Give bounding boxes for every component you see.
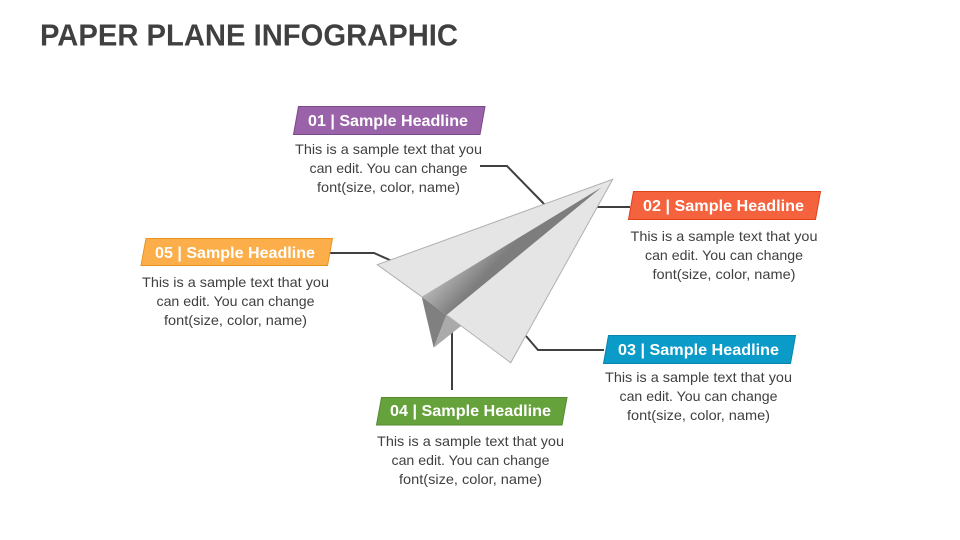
body 02: can edit. You can change <box>645 247 803 263</box>
headline 01: 01 | Sample Headline <box>308 113 468 130</box>
body 04: can edit. You can change <box>392 452 550 468</box>
connector: 02 <box>596 206 630 208</box>
headline 02: 02 | Sample Headline <box>643 198 804 215</box>
body 01: This is a sample text that you <box>295 141 482 157</box>
body 05: can edit. You can change <box>156 293 315 309</box>
headline 05: 05 | Sample Headline <box>155 245 315 262</box>
callout 01 <box>294 106 485 195</box>
banner 05 <box>141 238 332 266</box>
title: PAPER PLANE INFOGRAPHIC <box>40 18 458 52</box>
headline 03: 03 | Sample Headline <box>618 342 779 359</box>
callout 05 <box>141 238 332 328</box>
body 03: This is a sample text that you <box>605 369 792 385</box>
body 03: font(size, color, name) <box>627 407 770 423</box>
callout 04 <box>376 398 567 487</box>
body 02: This is a sample text that you <box>630 228 818 244</box>
body 05: font(size, color, name) <box>164 312 307 328</box>
banner 03 <box>604 336 796 364</box>
banner 02 <box>628 192 820 220</box>
connector: 03 <box>526 336 604 350</box>
connector: 04 <box>451 330 453 390</box>
body 02: font(size, color, name) <box>652 266 796 282</box>
body 05: This is a sample text that you <box>142 274 329 290</box>
body 01: can edit. You can change <box>310 160 468 176</box>
icon: paper plane <box>377 179 613 363</box>
callout 03 <box>604 336 796 423</box>
connector: 01 <box>480 166 546 206</box>
banner 04 <box>376 398 567 425</box>
banner 01 <box>294 106 485 134</box>
body 03: can edit. You can change <box>620 388 778 404</box>
body 04: font(size, color, name) <box>399 471 542 487</box>
connector: 05 <box>330 253 392 261</box>
headline 04: 04 | Sample Headline <box>390 403 551 420</box>
callout 02 <box>628 192 820 282</box>
body 01: font(size, color, name) <box>317 179 460 195</box>
body 04: This is a sample text that you <box>377 433 564 449</box>
